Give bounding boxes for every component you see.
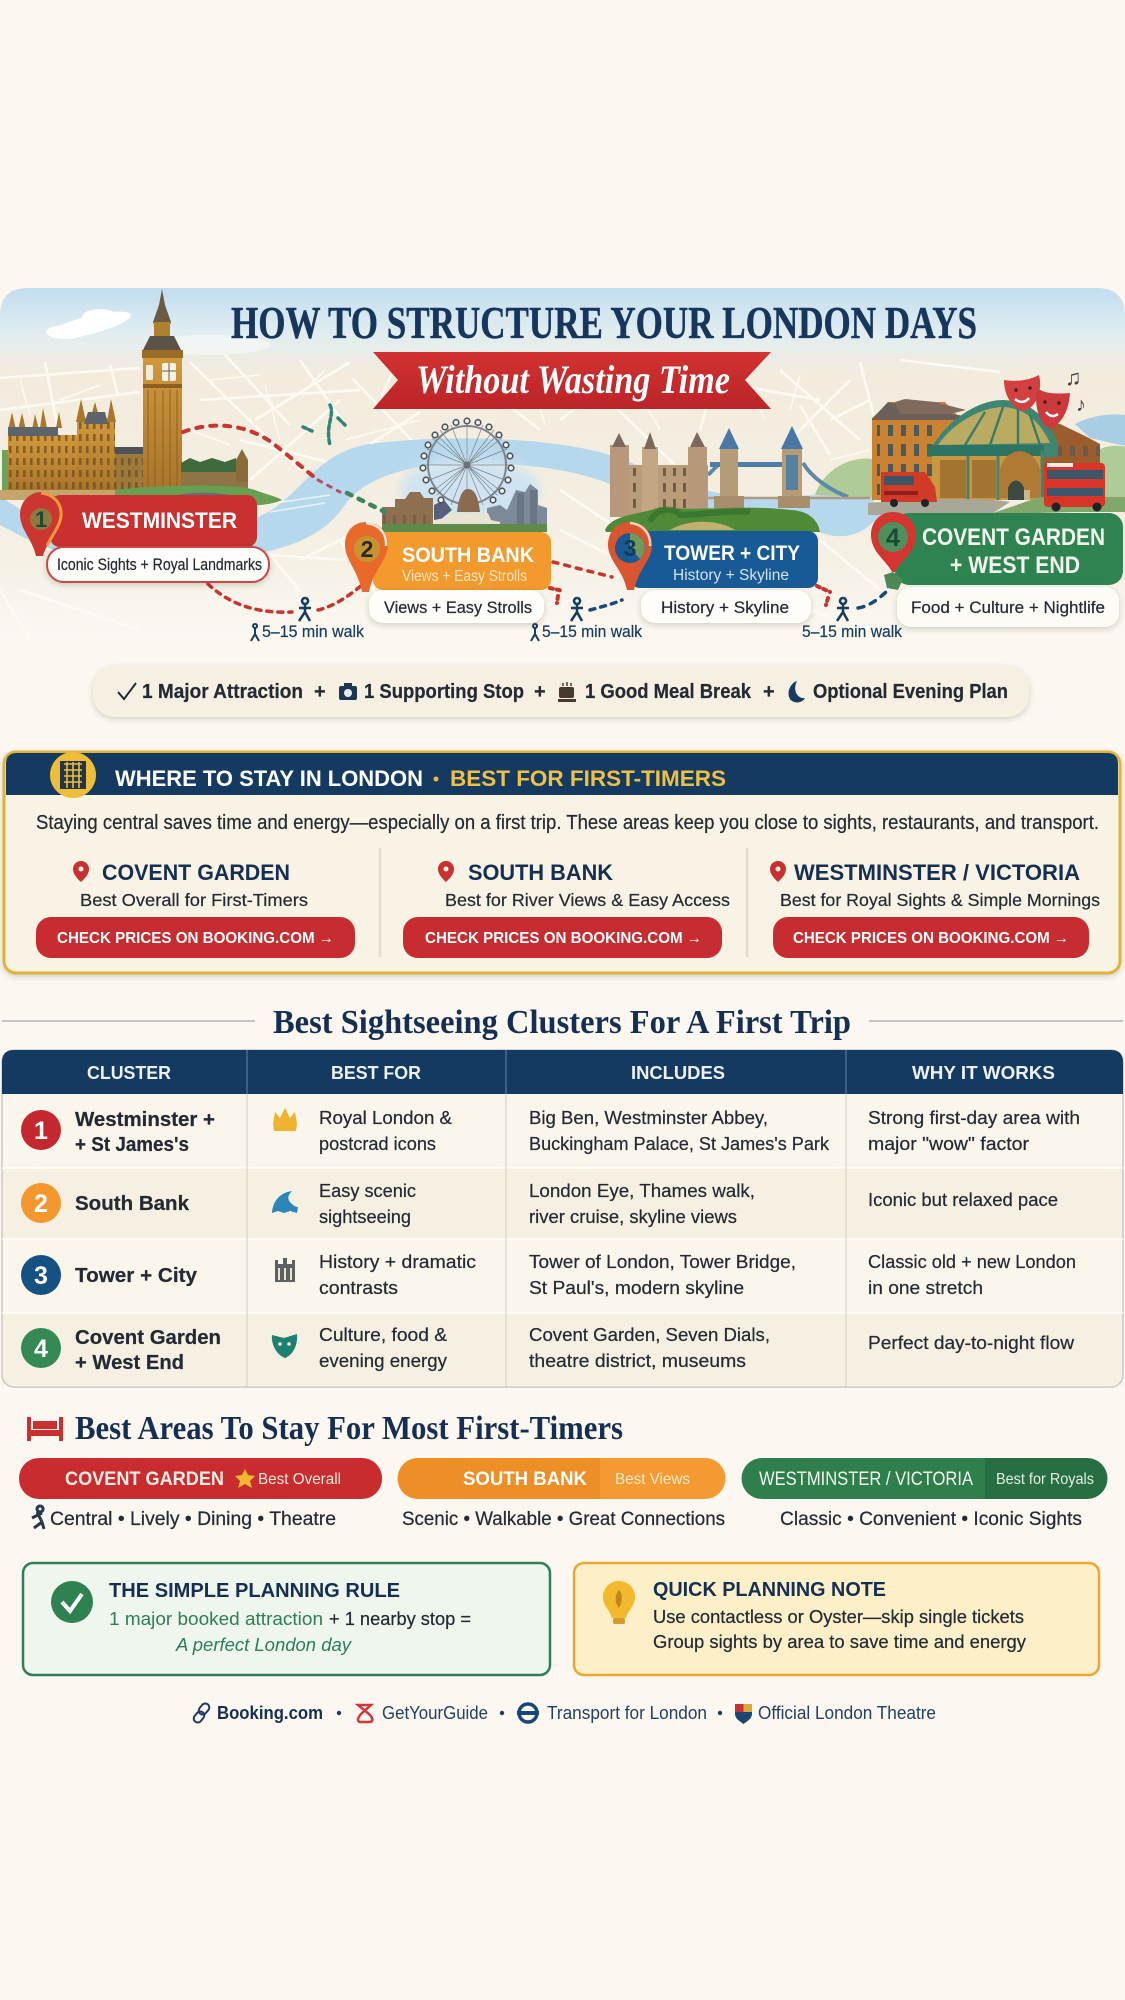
- area: South Bank: Scenic • Walkable • Great Connections: [402, 1509, 725, 1530]
- row 4: Culture, food &: [319, 1324, 448, 1345]
- icon: light bulb: [603, 1581, 635, 1624]
- column: Covent Garden: COVENT GARDEN: [102, 860, 290, 885]
- column: Westminster / Victoria: Best for Royal Sights & Simple Mornings: [780, 890, 1100, 910]
- row 2: sightseeing: [319, 1206, 411, 1227]
- icon: masks: [272, 1334, 297, 1358]
- column: Westminster / Victoria: [770, 860, 1100, 958]
- area: Covent Garden: [19, 1458, 382, 1530]
- formula pill: [93, 666, 1029, 717]
- pin 2: 2: [361, 536, 373, 562]
- walking route dashes: [183, 405, 888, 612]
- pin 3: 3: [624, 535, 636, 561]
- cloud: [46, 309, 131, 339]
- column: South Bank: CHECK PRICES ON BOOKING.COM →: [425, 930, 702, 947]
- area: Covent Garden: COVENT GARDEN: [65, 1469, 224, 1490]
- callout: planning rule: A perfect London day: [175, 1634, 353, 1655]
- row 3: contrasts: [319, 1277, 398, 1298]
- callout: quick note: QUICK PLANNING NOTE: [653, 1579, 886, 1601]
- header bar: [6, 753, 1118, 795]
- callout: planning rule: + 1 nearby stop =: [329, 1608, 471, 1629]
- pin 4: 4: [886, 524, 900, 552]
- callout: planning rule: [23, 1563, 550, 1675]
- row 1: [21, 1107, 1080, 1156]
- column: South Bank: SOUTH BANK: [468, 860, 613, 885]
- table: sightseeing clusters: [2, 1050, 1123, 1387]
- walk time 2: 5–15 min walk: [542, 622, 642, 641]
- stop 2: South Bank: [345, 522, 551, 623]
- icon: check: [51, 1581, 93, 1623]
- river: [0, 438, 880, 555]
- row 3: 3: [34, 1262, 48, 1290]
- table header: [2, 1050, 1123, 1094]
- column: Covent Garden: Best Overall for First-Timers: [80, 890, 308, 910]
- sky wash behind eye: [400, 458, 540, 522]
- icon: bed: [27, 1417, 63, 1441]
- banner ribbon: Without Wasting Time: [416, 357, 730, 402]
- formula pill: 1 Good Meal Break: [585, 681, 752, 703]
- formula pill: +: [763, 681, 775, 703]
- row 1: Strong first-day area with: [868, 1107, 1080, 1128]
- icon: wave: [272, 1191, 298, 1213]
- stop 4: Covent Garden + West End: Food + Culture + Nightlife: [911, 598, 1105, 617]
- stop 1: Westminster: [20, 492, 269, 582]
- header bar: WHERE TO STAY IN LONDON: [115, 766, 423, 791]
- header bar: BEST FOR FIRST-TIMERS: [450, 766, 726, 791]
- table header: BEST FOR: [331, 1062, 421, 1083]
- area: Covent Garden: Central • Lively • Dining • Theatre: [50, 1509, 336, 1530]
- icon: red bus right: [1044, 463, 1105, 512]
- icon: theatre shield: [735, 1704, 752, 1724]
- row 3: [21, 1251, 1076, 1298]
- row 2: Iconic but relaxed pace: [868, 1189, 1058, 1210]
- area: South Bank: SOUTH BANK: [463, 1469, 587, 1490]
- row 4: Covent Garden, Seven Dials,: [529, 1324, 770, 1345]
- icon: walker: [32, 1506, 44, 1529]
- stop 2: South Bank: Views + Easy Strolls: [384, 598, 532, 617]
- column: South Bank: Best for River Views & Easy Access: [445, 890, 730, 910]
- walk time 1: [251, 598, 364, 641]
- stop 1: Westminster: Iconic Sights + Royal Landmarks: [57, 556, 262, 574]
- icon: moon: [789, 681, 805, 702]
- row 2: London Eye, Thames walk,: [529, 1180, 755, 1201]
- stop 4: Covent Garden + West End: [871, 512, 1123, 627]
- icon: GetYourGuide: [358, 1705, 372, 1722]
- icon: Transport for London roundel: [517, 1704, 539, 1722]
- row 3: in one stretch: [868, 1277, 983, 1298]
- icon: Covent Garden market and buses: [868, 365, 1125, 515]
- row 2: South Bank: [75, 1193, 190, 1215]
- row 2: Easy scenic: [319, 1180, 416, 1201]
- table header: INCLUDES: [631, 1062, 725, 1083]
- icon: Tower of London and Tower Bridge: [605, 426, 870, 532]
- stop 1: Westminster: WESTMINSTER: [82, 508, 237, 533]
- icon: coffee cup: [558, 682, 576, 702]
- area: Westminster / Victoria: WESTMINSTER / VICTORIA: [759, 1469, 973, 1490]
- row 1: Big Ben, Westminster Abbey,: [529, 1107, 768, 1128]
- formula pill: +: [314, 681, 326, 703]
- formula pill: Optional Evening Plan: [813, 681, 1008, 703]
- formula pill: +: [534, 681, 546, 703]
- walk time 3: 5–15 min walk: [802, 622, 902, 641]
- column: Covent Garden: CHECK PRICES ON BOOKING.COM →: [57, 930, 334, 947]
- area: Covent Garden: Best Overall: [258, 1471, 341, 1488]
- icon: theatre masks: ♫: [1065, 365, 1082, 390]
- banner ribbon: [373, 352, 771, 409]
- stop 2: South Bank: Views + Easy Strolls: [402, 568, 527, 585]
- callout: quick note: Use contactless or Oyster—skip single tickets: [653, 1606, 1024, 1627]
- row 1: Westminster +: [75, 1109, 215, 1131]
- icon: Houses of Parliament and Big Ben: [0, 289, 282, 506]
- icon: red bus left: [881, 472, 937, 507]
- row 1: 1: [34, 1117, 48, 1145]
- footer sources: Booking.com: [217, 1703, 323, 1723]
- row 2: 2: [34, 1190, 48, 1218]
- footer sources: GetYourGuide: [382, 1703, 488, 1723]
- row 3: Classic old + new London: [868, 1251, 1076, 1272]
- icon: hotel: [50, 752, 96, 798]
- row 3: History + dramatic: [319, 1251, 476, 1272]
- area: Westminster / Victoria: Best for Royals: [996, 1471, 1094, 1488]
- stop 3: Tower + City: TOWER + CITY: [664, 542, 800, 565]
- row 3: Tower of London, Tower Bridge,: [529, 1251, 796, 1272]
- row 1: Royal London &: [319, 1107, 453, 1128]
- area: Westminster / Victoria: [742, 1458, 1108, 1530]
- column: South Bank: [403, 860, 730, 958]
- stop 3: Tower + City: History + Skyline: [673, 567, 789, 584]
- row 4: 4: [34, 1335, 48, 1363]
- panel: hero map: [0, 288, 1125, 650]
- formula pill: 1 Supporting Stop: [364, 681, 524, 703]
- stop 2: South Bank: SOUTH BANK: [402, 544, 534, 567]
- stop 3: Tower + City: History + Skyline: [661, 598, 789, 617]
- stop 4: Covent Garden + West End: + WEST END: [950, 552, 1080, 579]
- icon: theatre masks: [1004, 372, 1084, 428]
- callout: quick note: Group sights by area to save time and energy: [653, 1631, 1027, 1652]
- footer sources: Official London Theatre: [758, 1703, 936, 1723]
- pin 1: [20, 492, 63, 556]
- row 4: evening energy: [319, 1350, 448, 1371]
- pin 4: [871, 512, 916, 590]
- icon: London Eye and skyline: [382, 418, 547, 532]
- row 4: Perfect day-to-night flow: [868, 1332, 1075, 1353]
- icon: crown: [273, 1108, 297, 1131]
- icon: theatre masks: ♪: [1076, 394, 1086, 416]
- column: Westminster / Victoria: WESTMINSTER / VICTORIA: [794, 860, 1080, 885]
- footer sources: Transport for London: [547, 1703, 707, 1723]
- pin 1: 1: [35, 507, 47, 532]
- footer sources: [192, 1702, 936, 1724]
- pin 2: [345, 522, 388, 592]
- panel: where to stay: [4, 752, 1120, 973]
- stop 3: Tower + City: [608, 522, 818, 623]
- icon: castle: [275, 1258, 295, 1282]
- area: South Bank: Best Views: [615, 1471, 690, 1488]
- walk time 1: 5–15 min walk: [262, 622, 364, 641]
- area: Westminster / Victoria: Classic • Convenient • Iconic Sights: [780, 1509, 1082, 1530]
- row 1: + St James's: [75, 1134, 189, 1156]
- row 4: Covent Garden: [75, 1327, 221, 1349]
- walk time 3: [802, 598, 902, 641]
- row 1: major "wow" factor: [868, 1133, 1029, 1154]
- row 4: + West End: [75, 1352, 184, 1374]
- table header: WHY IT WORKS: [912, 1062, 1055, 1083]
- row 1: postcrad icons: [319, 1133, 436, 1154]
- icon: camera: [339, 683, 357, 700]
- column: Westminster / Victoria: CHECK PRICES ON BOOKING.COM →: [793, 930, 1069, 947]
- pin 3: [608, 522, 652, 590]
- formula pill: 1 Major Attraction: [142, 681, 303, 703]
- walk time 2: [531, 598, 642, 641]
- row 2: [21, 1180, 1058, 1227]
- row 4: [21, 1324, 1075, 1374]
- row 2: river cruise, skyline views: [529, 1206, 737, 1227]
- table header: CLUSTER: [87, 1062, 171, 1083]
- heading: clusters: Best Sightseeing Clusters For A First Trip: [273, 1004, 851, 1041]
- callout: quick note: [574, 1563, 1099, 1675]
- callout: planning rule: THE SIMPLE PLANNING RULE: [109, 1580, 400, 1602]
- row 4: theatre district, museums: [529, 1350, 746, 1371]
- area: South Bank: [398, 1458, 726, 1530]
- row 3: St Paul's, modern skyline: [529, 1277, 744, 1298]
- distant trees: [815, 446, 1125, 498]
- row 1: Buckingham Palace, St James's Park: [529, 1133, 830, 1154]
- heading: best areas: Best Areas To Stay For Most First-Timers: [75, 1410, 623, 1447]
- column: Covent Garden: [36, 860, 355, 958]
- icon: link: [192, 1702, 211, 1724]
- row 3: Tower + City: [75, 1265, 198, 1287]
- callout: planning rule: 1 major booked attraction: [109, 1608, 323, 1629]
